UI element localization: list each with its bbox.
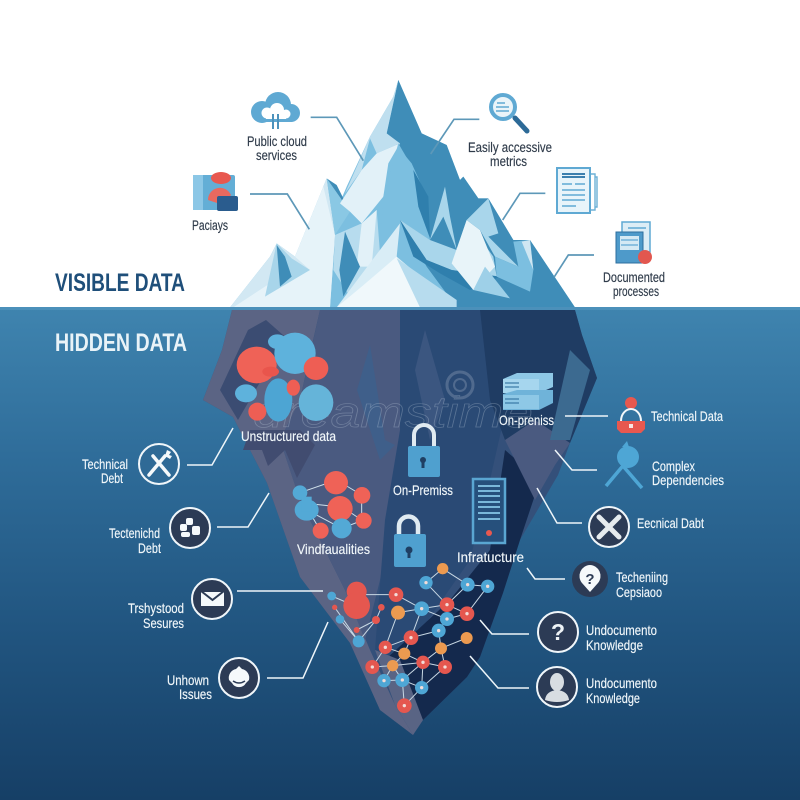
- label: easily accessible metrics: Easily accessive: [468, 140, 552, 155]
- label: easily accessible metrics: [468, 140, 552, 169]
- top leader lines: [250, 117, 594, 277]
- icon: padlock 2: [394, 516, 426, 567]
- icon: documented processes: [616, 222, 652, 264]
- label: infrastructure: Infratucture: [457, 549, 524, 565]
- label: public cloud services: Public cloud: [247, 134, 307, 149]
- watermark: [253, 372, 533, 437]
- heading: visible data: VISIBLE DATA: [55, 269, 185, 297]
- molecule: vulnerabilities: [293, 471, 372, 539]
- label: technical data: Technical Data: [651, 408, 723, 424]
- icon: complex dependencies: [606, 441, 642, 488]
- white leader lines: [187, 416, 608, 688]
- label: undocumented knowledge: [586, 622, 657, 653]
- icon: group cluster: [170, 508, 210, 548]
- label: technical debt: Debt: [101, 470, 123, 486]
- icon: privacy box: [193, 172, 238, 211]
- label: unknown issues: [167, 672, 212, 702]
- icon: question pin: ?: [585, 571, 595, 588]
- label: documented processes: [603, 270, 665, 299]
- icon: public cloud: [251, 92, 300, 129]
- label: threshold sensors: Sesures: [143, 615, 184, 631]
- iceberg above water: [230, 80, 575, 307]
- label: documented processes: processes: [613, 284, 659, 299]
- icon: wrench and screwdriver: [139, 444, 179, 484]
- icon: person: [537, 667, 577, 707]
- water surface highlight: [0, 307, 800, 310]
- label: technology comparison: Cepsiaoo: [616, 584, 662, 600]
- label: complex dependencies: Dependencies: [652, 472, 724, 488]
- label: paciays: Paciays: [192, 218, 228, 233]
- label: on-premise: On-Premiss: [393, 482, 453, 498]
- label: undocumented knowledge: Undocumento: [586, 622, 657, 638]
- label: easily accessible metrics: metrics: [490, 154, 527, 169]
- label: technical debt 2: Debt: [138, 540, 161, 556]
- sky background: [0, 0, 800, 307]
- label: technical debt 3: Eecnical Dabt: [637, 515, 704, 531]
- icon: question circle: ?: [551, 619, 565, 645]
- ocean background: [0, 307, 800, 800]
- label: complex dependencies: Complex: [652, 458, 695, 474]
- icon: server stack: [503, 373, 553, 410]
- label: public cloud services: [247, 134, 307, 163]
- label: complex dependencies: [652, 458, 724, 488]
- icon: crossed tools: [589, 507, 629, 547]
- icon: magnifier: [491, 95, 527, 131]
- icon: technical data: [617, 397, 645, 433]
- network graph: [327, 563, 494, 713]
- label: technical debt: [82, 456, 128, 486]
- label: undocumented knowledge 2: Knowledge: [586, 690, 640, 706]
- label: technical debt 2: Tectenichd: [109, 525, 160, 541]
- watermark: dreamstime: [253, 388, 533, 437]
- label: documented processes: Documented: [603, 270, 665, 285]
- label: undocumented knowledge 2: [586, 675, 657, 706]
- label: on-premise server: On-preniss: [499, 412, 554, 428]
- label: undocumented knowledge: Knowledge: [586, 637, 643, 653]
- icon: question circle: [538, 612, 578, 652]
- icon: server tower: [473, 479, 505, 543]
- label: vulnerabilities: Vindfaualities: [297, 541, 370, 557]
- heading: hidden data: HIDDEN DATA: [55, 329, 187, 357]
- label: technology comparison: Techeniing: [616, 569, 668, 585]
- label: technical debt: Technical: [82, 456, 128, 472]
- label: threshold sensors: [128, 600, 184, 631]
- label: unstructured data: Unstructured data: [241, 428, 336, 444]
- label: technology comparison: [616, 569, 668, 600]
- label: unknown issues: Issues: [179, 686, 212, 702]
- icon: document: [557, 168, 597, 213]
- label: public cloud services: services: [256, 148, 297, 163]
- icon: question pin: [572, 561, 608, 597]
- icon: envelope: [192, 579, 232, 619]
- label: threshold sensors: Trshystood: [128, 600, 184, 616]
- icon: padlock 1: [408, 425, 440, 477]
- iceberg below water: [0, 307, 800, 735]
- icon: unknown person: [219, 658, 259, 698]
- label: undocumented knowledge 2: Undocumento: [586, 675, 657, 691]
- blobs: unstructured data: [235, 333, 333, 422]
- label: unknown issues: Unhown: [167, 672, 209, 688]
- label: technical debt 2: [109, 525, 161, 556]
